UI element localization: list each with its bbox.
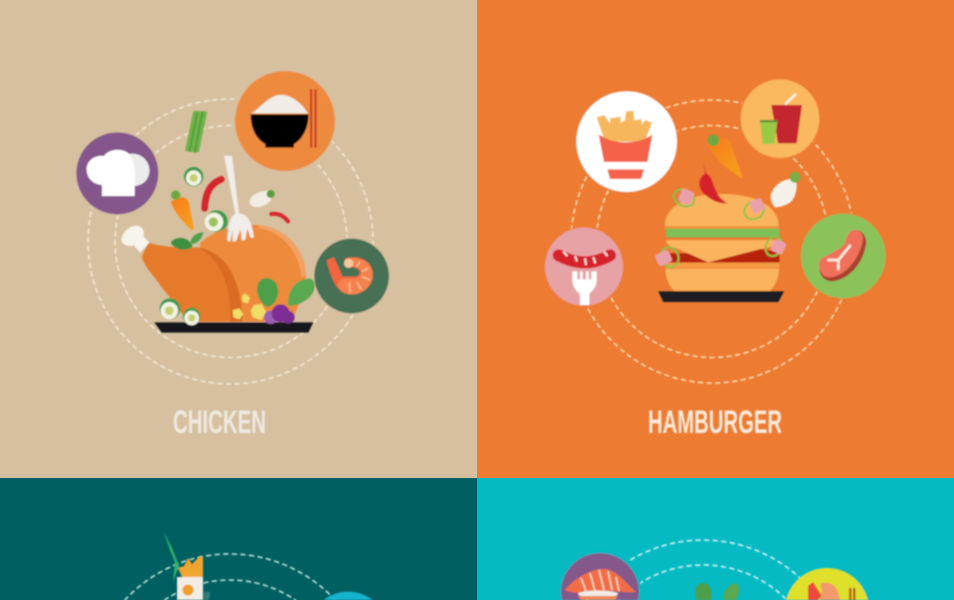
icon: cucumber garnish — [160, 298, 200, 325]
panel: chicken — [0, 0, 477, 478]
heading: hamburger: HAMBURGER — [648, 404, 782, 440]
icon: sushi badge — [559, 550, 641, 600]
heading: chicken: CHICKEN — [173, 404, 266, 440]
icon: carrot — [171, 190, 194, 230]
hamburger illustration — [544, 78, 887, 307]
icon: carrot — [708, 135, 743, 178]
icon: green beans — [185, 111, 207, 153]
dashed orbit rings — [88, 99, 373, 384]
icon: chef hat badge — [75, 131, 160, 216]
panel: sushi — [477, 478, 954, 600]
icon: radish — [249, 190, 275, 207]
chicken illustration — [75, 70, 390, 333]
panel: hamburger — [477, 0, 954, 478]
icon: cucumber slice middle — [205, 210, 228, 232]
hamburger — [665, 194, 779, 291]
icon: red chilli — [205, 179, 221, 208]
icon: small chilli — [271, 214, 288, 221]
icon: plate — [658, 291, 784, 302]
icon: fries box with greens — [164, 532, 210, 600]
dashed orbit rings — [587, 540, 819, 600]
icon: lettuce leaves — [695, 583, 739, 600]
icon: lettuce and grapes — [257, 278, 315, 324]
icon: sausage badge — [544, 226, 624, 307]
icon: herb leaves — [171, 232, 203, 250]
icon: fries badge — [575, 90, 678, 193]
icon: onion and ham toppings — [653, 185, 788, 272]
icon: drinks badge — [739, 78, 821, 159]
dashed orbit rings — [571, 100, 854, 383]
icon: corn pieces — [233, 293, 266, 320]
icon: cyan badge — [324, 592, 372, 600]
icon: rice bowl badge — [234, 70, 336, 172]
icon: cucumber slice top — [184, 167, 203, 186]
icon: plate — [154, 322, 313, 333]
icon: chilli — [700, 164, 727, 203]
icon: shrimp and chopsticks badge — [785, 568, 869, 600]
icon: steak badge — [800, 212, 887, 300]
dashed orbit rings — [125, 554, 335, 600]
icon: shrimp badge — [313, 237, 390, 315]
icon: radish — [771, 172, 800, 207]
chicken body — [142, 225, 306, 322]
panel: fries — [0, 478, 477, 600]
icon: fork — [224, 156, 254, 242]
icon: drumstick bone — [121, 226, 149, 253]
